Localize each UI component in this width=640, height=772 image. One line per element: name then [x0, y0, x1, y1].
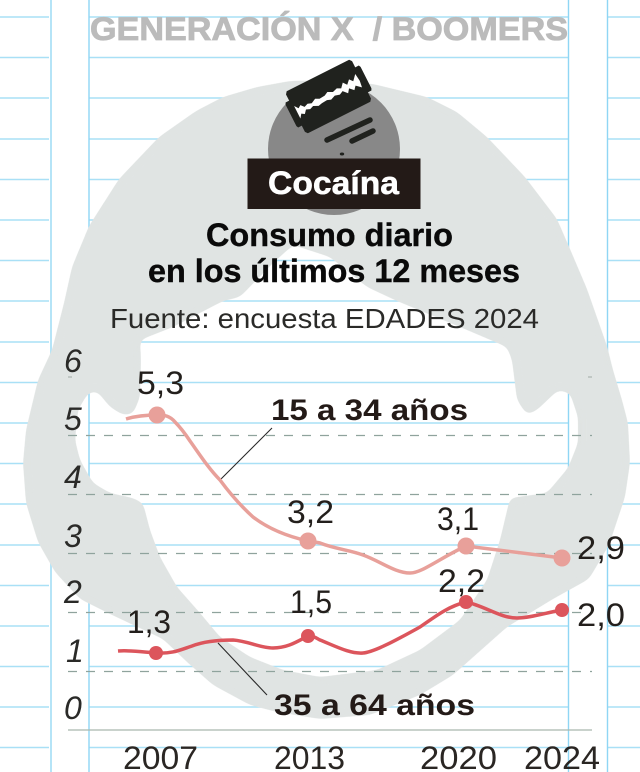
title: GENERACIÓN X / BOOMERS — [90, 11, 568, 47]
y axis labels: 3 — [64, 518, 82, 554]
value labels: 2,9 — [577, 530, 625, 566]
y axis labels: 6 — [64, 343, 82, 379]
label: Cocaína — [248, 158, 420, 209]
y axis labels: 5 — [64, 401, 82, 437]
series label: 15 a 34 años: 15 a 34 años — [271, 394, 468, 427]
chart gridlines and axis — [68, 377, 592, 730]
x axis labels — [123, 740, 600, 772]
line series: 35 a 64 años — [118, 595, 569, 660]
line series: 15 a 34 años — [126, 406, 570, 573]
source: Fuente: encuesta EDADES 2024 — [110, 303, 539, 334]
value labels: 2,2 — [438, 563, 485, 599]
y axis labels: 0 — [64, 690, 82, 726]
value labels: 2,0 — [577, 597, 625, 633]
y axis labels: 1 — [66, 633, 84, 669]
value labels: 3,2 — [287, 494, 334, 530]
background shape: grey broken ring — [23, 80, 630, 719]
y axis labels: 4 — [64, 459, 82, 495]
value labels: 3,1 — [437, 501, 479, 537]
value labels — [127, 365, 625, 640]
value labels: 5,3 — [137, 365, 184, 401]
value labels: 1,3 — [127, 604, 171, 640]
heading — [148, 217, 520, 289]
series label: 35 a 64 años: 35 a 64 años — [274, 689, 475, 722]
heading: en los últimos 12 meses — [148, 253, 520, 289]
heading: Consumo diario — [206, 217, 453, 253]
leader lines — [218, 428, 272, 695]
icon: razor blade on grey circle — [268, 57, 400, 215]
y axis labels — [63, 343, 84, 726]
value labels: 1,5 — [290, 584, 332, 620]
label: Cocaína: Cocaína — [268, 165, 399, 201]
y axis labels: 2 — [63, 574, 82, 610]
